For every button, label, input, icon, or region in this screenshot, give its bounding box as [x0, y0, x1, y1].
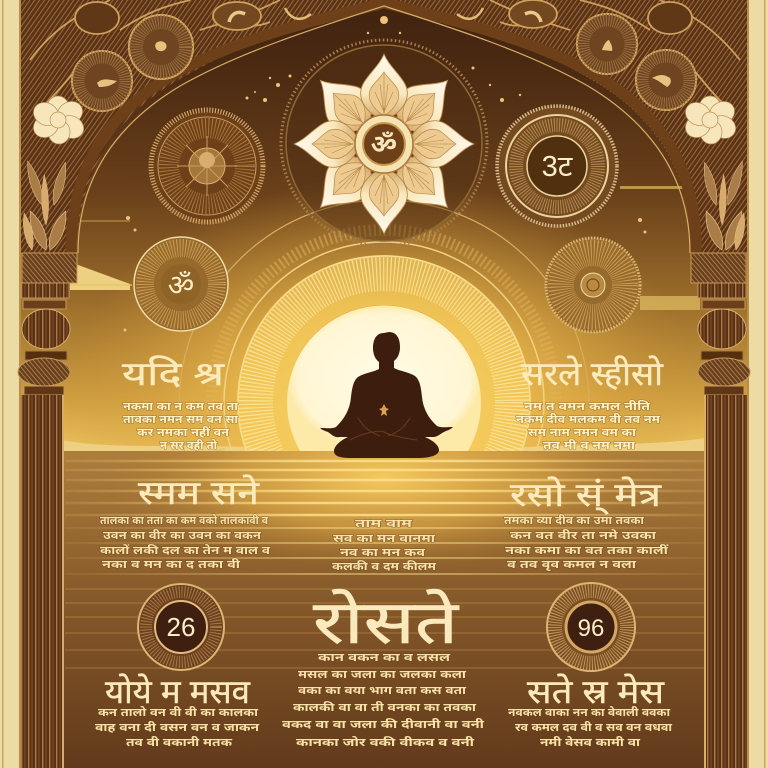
heading: middle left: स्मम सने	[138, 473, 260, 511]
body: lower right	[508, 705, 673, 749]
body: centre bottom: मसल का जला का जलका कला	[298, 669, 467, 681]
column left	[18, 253, 77, 768]
body: centre middle	[332, 518, 437, 573]
body: middle left	[100, 514, 270, 571]
body: upper right	[516, 400, 661, 452]
spandrel medallion left	[72, 51, 132, 111]
body: middle left: कालों लकी दल का तेन म वाल व	[100, 543, 270, 557]
spandrel medallion top left	[129, 15, 193, 79]
body: centre middle: ताम वाम	[355, 518, 413, 530]
column right	[691, 253, 750, 768]
botanical leaves right	[700, 160, 748, 252]
arch band right	[380, 2, 696, 255]
body: middle right: कन वत वीर ता नमे उवका	[510, 528, 657, 542]
body: centre bottom	[282, 652, 485, 749]
body: lower left: कन तालो वन वी वी का कालका	[98, 706, 259, 719]
lotus	[294, 54, 474, 234]
meditating figure	[320, 332, 453, 458]
sun	[287, 305, 481, 451]
pale dunes	[62, 262, 706, 452]
body: lower right: रव कमल दव वी व सव वन वधवा	[515, 721, 673, 734]
body: middle right: व तव वृव कमल न वला	[507, 559, 637, 572]
lotus centre: ॐ	[371, 129, 397, 159]
body: upper right: तव मी व नम नमा	[543, 439, 636, 452]
spandrel: left	[21, 0, 380, 253]
body: centre middle: सव का मन वानमा	[333, 533, 436, 545]
lotus centre	[355, 115, 413, 173]
body: upper left	[123, 401, 239, 452]
body: upper left: कर नमका नहीं वन	[137, 426, 229, 439]
spandrels and arch	[21, 0, 747, 255]
body: centre middle: कलकी व दम कीलम	[332, 560, 437, 573]
spandrel: right	[390, 0, 747, 253]
body: lower left	[95, 706, 259, 749]
body: lower left: तव वी वकानी मतक	[126, 736, 233, 749]
body: middle left: नका व मन का द तका वी	[102, 558, 241, 571]
botanical leaves left	[20, 160, 71, 252]
body: centre bottom: वकद वा वा जला की दीवानी वा वनी	[282, 718, 485, 731]
medallion: mid left: ॐ	[168, 270, 194, 302]
medallion: mid right	[546, 238, 640, 332]
spandrel medallion right	[636, 50, 696, 110]
medallion: lower left: 26	[167, 612, 195, 642]
body: centre bottom: कानका जोर वकी वीकव व वनी	[296, 736, 475, 749]
spandrel medallion top right	[577, 14, 637, 74]
heading: middle right: रसो स्ं मेत्र	[510, 475, 662, 515]
body: upper left: नकमा का न कम तव ता	[123, 401, 239, 413]
heading: lower left: योये म मसव	[105, 672, 251, 710]
body: centre middle: नव का मन कव	[340, 547, 425, 559]
body: upper left: न सर वही तो	[160, 439, 218, 452]
body: centre bottom: कालकी वा वा ती वनका का तवका	[293, 701, 477, 714]
body: middle right	[504, 514, 669, 572]
heading: upper left: यदि श्र	[122, 355, 225, 392]
medallion: lower right	[547, 583, 635, 671]
horizon bands upper	[70, 186, 700, 310]
flower right	[681, 96, 739, 144]
body: upper right: सम नाम नमन वम का	[528, 427, 637, 439]
body: upper right: नकम दीव मलकम वी तव नम	[516, 413, 661, 426]
body: middle left: उवन का वीर का उवन का वकन	[103, 529, 261, 542]
body: upper left: तावका नमन सम वन सा	[123, 414, 239, 426]
body: middle left: तालका का तता का कम वको तालकावी व	[100, 514, 268, 527]
sun halo rings	[179, 200, 589, 610]
body: upper right: नम त वमन कमल नीति	[524, 400, 650, 413]
top floral ornaments	[30, 0, 740, 110]
body: lower right: नवकल वाका नन का वेवाली ववका	[508, 705, 671, 719]
body: lower right: नमी वेसव कामी वा	[540, 735, 641, 749]
medallion: mid left	[134, 237, 228, 331]
medallion: lower left	[138, 584, 224, 670]
medallion: lower right: 96	[578, 615, 604, 642]
heading: upper right: सरले स्हीसो	[521, 354, 664, 392]
flower left	[29, 96, 87, 144]
medallion: upper left	[151, 110, 263, 222]
heading: lower right: सते स्र मेस	[527, 672, 665, 710]
body: middle right: नका कमा का वत तका कालीं	[505, 544, 669, 557]
figure legs highlights	[350, 418, 417, 440]
water with stripes	[63, 451, 706, 768]
figure chest symbol	[379, 404, 389, 416]
heading: centre large: रोसते	[313, 589, 460, 656]
medallion: upper right: 3ट	[542, 151, 574, 183]
body: middle right: तमका व्या दीव का उमा तवका	[504, 514, 645, 527]
medallion: upper right	[497, 106, 617, 226]
arch band left	[71, 2, 388, 255]
body: lower left: वाह वना दी वसन वन व जाकन	[95, 721, 259, 734]
body: centre bottom: वका का वया भाग वता कस वता	[298, 685, 467, 697]
sparkles	[124, 16, 646, 332]
body: centre bottom: कान वकन का व लसल	[318, 652, 451, 664]
large thin circle behind lotus	[281, 40, 487, 246]
